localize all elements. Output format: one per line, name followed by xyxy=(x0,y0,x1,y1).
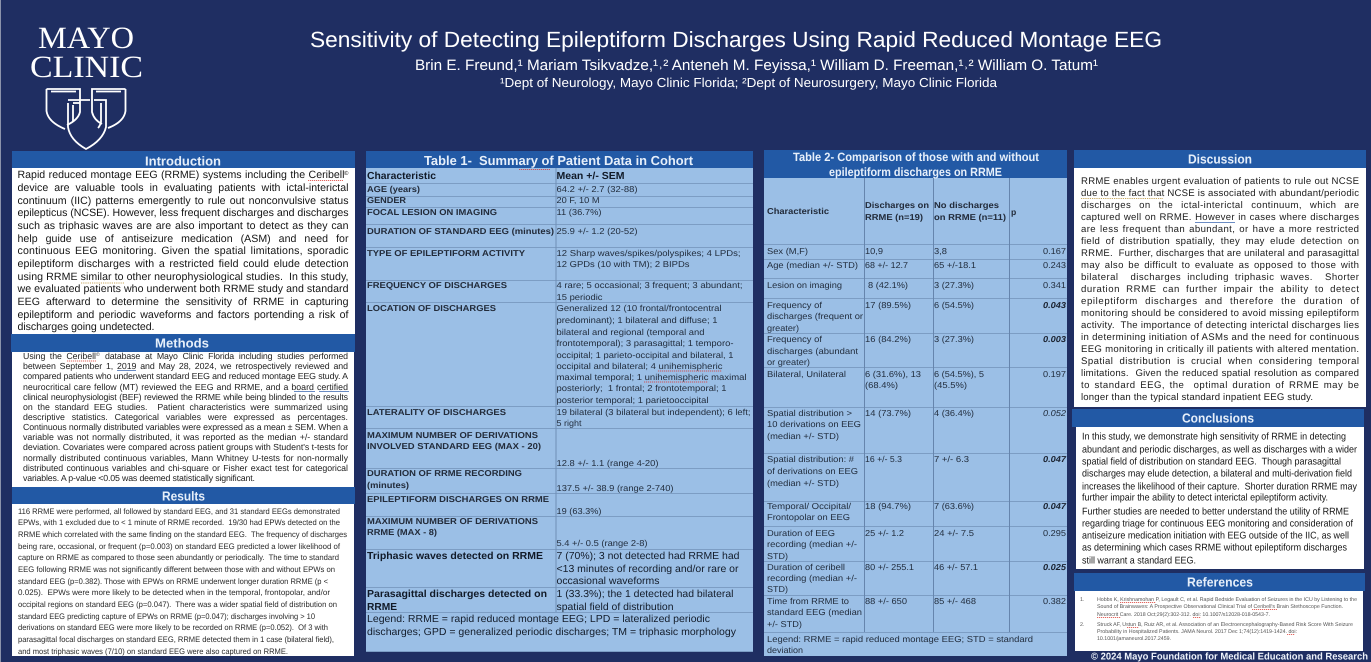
affiliations: ¹Dept of Neurology, Mayo Clinic Florida; ²Dept of Neurosurgery, Mayo Clinic Florida xyxy=(500,75,998,90)
row: bilateral: (68.4%) xyxy=(865,380,898,390)
table 1 header row: Characteristic xyxy=(367,171,436,182)
text block: introduction: continuous EEG monitoring. Given the spatial limitations, sporadic xyxy=(18,245,349,257)
row: duration of ceribell xyxy=(767,562,1066,594)
legend: table 1: Legend: RRME = rapid reduced montage EEG; LPD = lateralized periodic xyxy=(367,614,710,625)
heading: table 2: epileptiform discharges on RRME xyxy=(829,165,1002,179)
panel: methods xyxy=(11,334,355,487)
text block: introduction: epileptiform and periodic waveforms and factors portending a risk of xyxy=(18,309,349,321)
row: frequency frequent or greater: 6 (54.5%) xyxy=(934,300,974,310)
reference 2: 2. xyxy=(1080,622,1084,628)
row: temporal occipital frontopolar: Temporal/ Occipital/ xyxy=(767,501,852,511)
row: time to standard EEG: standard EEG (median xyxy=(767,607,862,617)
text block: introduction: Rapid reduced montage EEG (RRME) systems including the Ceribell xyxy=(18,169,344,181)
authors: Brin E. Freund,¹ Mariam Tsikvadze,¹˒² Anteneh M. Feyissa,¹ William D. Freeman,¹˒² William O. Tatum¹ xyxy=(415,57,1098,74)
row: duration of EEG: 24 +/- 7.5 xyxy=(934,528,974,538)
heading: introduction: Introduction xyxy=(145,154,221,168)
row: temporal occipital frontopolar xyxy=(767,501,1067,522)
text block: results: standard EEG predicting capture of EPWs on RRME (p=0.047); discharges involving > 10 xyxy=(18,612,316,621)
row: frequency frequent or greater: greater) xyxy=(767,323,799,333)
text block: discussion: RRME. Further, discharges that are unilateral and parasagittal xyxy=(1081,248,1359,259)
panel: table 1 xyxy=(366,151,753,652)
text block: methods: compared patients who underwent standard EEG and reduced montage EEG study. A xyxy=(23,371,348,381)
row: time to standard EEG: +/- STD) xyxy=(767,619,802,629)
text block: introduction: epilepticus (NCSE). However, less frequent discharges and discharges xyxy=(18,207,348,219)
panel: table 2 xyxy=(764,150,1067,656)
text block: discussion: discharges on the ictal-interictal continuum, which are xyxy=(1081,200,1359,211)
row: bilateral: Bilateral, Unilateral xyxy=(767,369,846,379)
row: spatial number: 16 +/- 5.3 xyxy=(865,454,902,464)
text block: methods: Continuous normally distributed variables were expressed as a mean ± SEM. When a xyxy=(23,422,348,432)
heading: methods: Methods xyxy=(155,336,209,350)
row: spatial over 10 xyxy=(767,408,1066,441)
text block: introduction xyxy=(16,169,349,333)
table 2 header row: Characteristic xyxy=(767,206,829,216)
row: spatial over 10: Spatial distribution > xyxy=(767,408,852,418)
text block: results xyxy=(18,507,347,656)
legend: table 2: Legend: RRME = rapid reduced montage EEG; STD = standard xyxy=(767,634,1033,644)
row: frequency: 4 rare; 5 occasional; 3 frequent; 3 abundant; xyxy=(556,280,742,290)
row: duration of EEG: recording (median +/- xyxy=(767,539,857,549)
row: duration of EEG: STD) xyxy=(767,551,788,561)
text block: discussion: are less frequent than abundant, or have a more restricted xyxy=(1081,224,1359,235)
logo wordmark: MAYO xyxy=(38,20,134,55)
text block: discussion: to standard EEG, the optimal duration of RRME may be xyxy=(1081,380,1359,391)
row: temporal occipital frontopolar: Frontopolar on EEG xyxy=(767,512,850,522)
text block: conclusions: Further studies are needed to better understand the utility of RRME xyxy=(1082,506,1349,518)
text block: results: derivations on standard EEG were more likely to be recorded on RRME (p=0.052). Of 3 with xyxy=(18,623,328,632)
row: sex xyxy=(767,246,1066,256)
row: spatial over 10: 0.052 xyxy=(1043,408,1066,418)
row: location: maximal temporal; 1 unihemispheric maximal xyxy=(556,372,747,382)
text block: methods: distributed continuous variables and chi-square or Fisher exact test for categorical xyxy=(23,463,348,473)
text block: discussion: bilateral discharges including triphasic waves. Shorter xyxy=(1081,272,1360,283)
row: lesion: 0.341 xyxy=(1043,280,1066,290)
row: frequency frequent or greater: 17 (89.5%) xyxy=(865,300,911,310)
reference 2 xyxy=(1080,622,1353,642)
row: frequency abundant or greater: or greater) xyxy=(767,357,810,367)
reference 1: 1. xyxy=(1080,597,1084,603)
row: frequency frequent or greater xyxy=(767,300,1066,333)
row: discharges on RRME: 19 (63.3%) xyxy=(556,506,602,516)
text block: results: standard EEG (p=0.382). Those with EPWs on RRME underwent longer duration RRME (p < xyxy=(18,577,328,586)
row: parasagittal: Parasagittal discharges detected on xyxy=(367,589,547,600)
table 1 header row xyxy=(367,171,624,182)
row: sex: 3,8 xyxy=(934,246,947,256)
row: duration of ceribell: recording (median +/- xyxy=(767,573,857,583)
row: type of activity: 12 GPDs (10 with TM); 2 BIPDs xyxy=(556,259,690,269)
row: duration of ceribell: STD) xyxy=(767,584,788,594)
text block: introduction: epileptiform discharges with a restricted field could elude detection xyxy=(18,258,349,270)
row: lesion: 8 (42.1%) xyxy=(868,280,908,290)
text block: discussion: duration RRME can further impair the ability to detect xyxy=(1081,284,1359,295)
row: maximum derivations standard: INVOLVED STANDARD EEG (MAX - 20) xyxy=(367,441,541,451)
row: spatial over 10: (median +/- STD) xyxy=(767,431,839,441)
row: time to standard EEG: 0.382 xyxy=(1043,596,1066,606)
row: maximum derivations standard: 12.8 +/- 1.1 (range 4-20) xyxy=(556,458,659,468)
table 2 header row: No discharges xyxy=(934,200,999,210)
row: sex: Sex (M,F) xyxy=(767,246,808,256)
row: duration of standard EEG: 25.9 +/- 1.2 (20-52) xyxy=(556,226,638,236)
text block: discussion: monitoring should be considered to avoid missing epileptiform xyxy=(1081,308,1359,319)
text block: methods: neurocritical care fellow (MT) reviewed the EEG and RRME, and a board certified xyxy=(23,382,348,392)
row: time to standard EEG: Time from RRME to xyxy=(767,596,849,606)
row: duration of EEG: Duration of EEG xyxy=(767,528,835,538)
row: spatial over 10: 4 (36.4%) xyxy=(934,408,974,418)
row: frequency frequent or greater: discharges (frequent or xyxy=(767,311,863,321)
text block: discussion: limitations. Given the reduced spatial resolution as compared xyxy=(1081,368,1359,379)
row: duration of EEG: 0.295 xyxy=(1043,528,1066,538)
row: triphasic waves: 7 (70%); 3 not detected had RRME had xyxy=(556,551,740,562)
panel: introduction xyxy=(12,151,355,334)
text block: methods: clinical neurophysiologist (BEF) reviewed the RRME while being blinded to the results xyxy=(23,392,349,402)
row: lesion: Lesion on imaging xyxy=(767,280,842,290)
row: duration of standard EEG: DURATION OF STANDARD EEG (minutes) xyxy=(367,226,554,236)
text block: methods: on the standard EEG studies. Patient characteristics were summarized using xyxy=(23,402,348,412)
text block: discussion: EEG monitoring in critically ill patients with altered mentation. xyxy=(1081,344,1359,355)
row: frequency abundant or greater: Frequency of xyxy=(767,334,823,344)
text block: methods xyxy=(23,351,349,483)
text block: conclusions: regarding triage for continuous EEG monitoring and consideration of xyxy=(1082,518,1353,530)
text block: introduction: continuum (IIC) patterns emergently to rule out nonconvulsive status xyxy=(18,195,348,207)
row: parasagittal: RRME xyxy=(367,602,397,613)
table 2 header row xyxy=(767,200,1016,222)
row: spatial number xyxy=(767,454,1067,488)
row: lesion xyxy=(767,280,1066,290)
row: triphasic waves xyxy=(367,551,740,587)
row: duration of ceribell: 0.025 xyxy=(1043,562,1066,572)
text block: methods: variable was not normally distributed, it was reported as the median +/- standard xyxy=(23,432,348,442)
text block: discussion: may also be difficult to evaluate as opposed to those with xyxy=(1081,260,1359,271)
table 2 header row: Discharges on xyxy=(865,200,929,210)
row: frequency abundant or greater: 0.003 xyxy=(1043,334,1066,344)
reference 2: Probability in Hospitalized Patients. JAMA Neurol. 2017 Dec 1;74(12):1419-1424. doi: xyxy=(1097,629,1297,635)
reference 1: Neurocrit Care. 2018 Oct;29(2):302-312. doi: 10.1007/s12028-018-0543-7. xyxy=(1097,612,1270,618)
row: frequency abundant or greater xyxy=(767,334,1066,367)
text block: discussion: longer than the typical standard inpatient EEG study. xyxy=(1081,392,1313,403)
row: focal lesion xyxy=(367,207,602,217)
row: spatial number: of derivations on EEG xyxy=(767,466,858,476)
row: temporal occipital frontopolar: 7 (63.6%) xyxy=(934,501,974,511)
row: temporal occipital frontopolar: 0.047 xyxy=(1043,501,1067,511)
row: gender xyxy=(367,195,600,205)
text block: discussion: field of distribution spatially, they may elude detection on xyxy=(1081,236,1359,247)
row: age: 68 +/- 12.7 xyxy=(865,260,908,270)
row: type of activity xyxy=(367,248,740,269)
text block: results: parasagittal focal discharges on standard EEG, RRME detected them in 1 case (bilateral field), xyxy=(18,635,334,644)
row: frequency abundant or greater: 3 (27.3%) xyxy=(934,334,974,344)
reference 2: Struck AF, Ustun B, Ruiz AR, et al. Association of an Electroencephalography-Based Risk Score With Seizure xyxy=(1097,622,1353,628)
row: age: 0.243 xyxy=(1043,260,1066,270)
text block: conclusions: still warrant a standard EEG. xyxy=(1082,556,1196,566)
row: spatial number: 7 +/- 6.3 xyxy=(934,454,969,464)
row: age: 65 +/-18.1 xyxy=(934,260,976,270)
row: parasagittal: 1 (33.3%); the 1 detected had bilateral xyxy=(556,589,734,600)
row: frequency xyxy=(367,280,742,302)
heading: results: Results xyxy=(162,488,205,504)
text block: discussion: captured well on RRME. However in cases where discharges xyxy=(1081,212,1359,223)
heading: table 2: Table 2- Comparison of those with and without xyxy=(793,150,1039,164)
row: maximum derivations RRME: 5.4 +/- 0.5 (range 2-8) xyxy=(556,538,648,548)
text block: methods: variables. A p-value <0.05 was deemed statistically significant. xyxy=(23,473,255,483)
row: location: posterior temporal; 1 parietooccipital xyxy=(556,395,709,405)
row: location: Generalized 12 (10 frontal/frontocentral xyxy=(556,303,722,313)
icon: three shields xyxy=(46,89,126,149)
row: age xyxy=(767,260,1066,270)
text block: introduction: © xyxy=(344,170,349,177)
reference 1: Hobbs K, Krishnamohan P, Legault C, et al. Rapid Bedside Evaluation of Seizures in the ICU by Listening to the xyxy=(1097,597,1357,603)
row: triphasic waves: Triphasic waves detected on RRME xyxy=(367,551,543,562)
text block: discussion: Spatial distribution is crucial when considering temporal xyxy=(1081,356,1359,367)
panel: conclusions xyxy=(1072,409,1364,569)
row: parasagittal xyxy=(367,589,734,613)
row: bilateral: 6 (54.5%), 5 xyxy=(934,369,984,379)
text block: methods: Using the Ceribell xyxy=(23,351,96,361)
row: gender: GENDER xyxy=(367,195,407,205)
text block: conclusions: antiseizure medication initiation with EEG outside of the IIC, as well xyxy=(1082,530,1349,542)
text block: introduction: we evaluated patients who underwent both RRME study and standard xyxy=(16,283,349,295)
row: maximum derivations RRME xyxy=(367,516,648,548)
title: Sensitivity of Detecting Epileptiform Discharges Using Rapid Reduced Montage EEG xyxy=(310,27,1162,52)
row: laterality: 5 right xyxy=(556,418,582,428)
row: lesion: 3 (27.3%) xyxy=(934,280,974,290)
row: frequency: 15 periodic xyxy=(556,292,603,302)
row: temporal occipital frontopolar: 18 (94.7%) xyxy=(865,501,911,511)
row: time to standard EEG: 85 +/- 468 xyxy=(934,596,976,606)
heading: table 2 xyxy=(793,150,1039,179)
row: laterality: LATERALITY OF DISCHARGES xyxy=(367,407,506,417)
row: maximum derivations RRME: MAXIMUM NUMBER OF DERIVATIONS xyxy=(367,516,538,526)
row: location xyxy=(367,303,747,405)
text block: conclusions: spatial field of distribution on standard EEG. Though parasagittal xyxy=(1082,456,1341,468)
row: laterality xyxy=(367,407,750,428)
table 2 header row: RRME (n=19) xyxy=(865,212,923,222)
row: location: frontotemporal); 3 parasagittal; 1 temporo- xyxy=(556,338,734,348)
table 2 header row: on RRME (n=11) xyxy=(934,212,1006,222)
text block: discussion: RRME enables urgent evaluation of patients to rule out NCSE xyxy=(1081,176,1359,187)
panel: results xyxy=(12,487,355,656)
row: triphasic waves: <13 minutes of recording and/or rare or xyxy=(556,564,739,575)
row: frequency frequent or greater: 0.043 xyxy=(1043,300,1066,310)
row: frequency abundant or greater: discharges (abundant xyxy=(767,346,859,356)
text block: conclusions: further impair the ability to detect interictal epileptiform activity. xyxy=(1082,492,1328,504)
row: spatial number: Spatial distribution: # xyxy=(767,454,854,464)
legend: table 1: discharges; GPD = generalized periodic discharges; TM = triphasic morphology xyxy=(367,627,737,638)
row: time to standard EEG xyxy=(767,596,1066,629)
row: spatial over 10: 14 (73.7%) xyxy=(865,408,911,418)
row: laterality: 19 bilateral (3 bilateral but independent); 6 left; xyxy=(556,407,750,417)
text block: introduction: such as triphasic waves are are also important to detect as they can xyxy=(18,220,349,232)
text block: results: capture on RRME as compared to those seen abundantly or periodically. The time to standard xyxy=(18,553,339,562)
heading: discussion: Discussion xyxy=(1188,152,1252,166)
row: bilateral: (45.5%) xyxy=(934,380,967,390)
text block: conclusions: as determining which cases RRME without epileptiform discharges xyxy=(1082,542,1347,554)
heading: references: References xyxy=(1187,574,1253,590)
text block: results: being rare, occasional, or frequent (p=0.003) on standard EEG predicted a lower likelihood of xyxy=(18,542,341,551)
logo wordmark: CLINIC xyxy=(30,49,143,84)
row: maximum derivations standard xyxy=(367,430,659,468)
row: focal lesion: 11 (36.7%) xyxy=(556,207,602,217)
row: frequency abundant or greater: 16 (84.2%) xyxy=(865,334,911,344)
text block: results: and most triphasic waves (7/10) on standard EEG were also captured on RRME. xyxy=(18,647,288,656)
row: triphasic waves: occasional waveforms xyxy=(556,576,660,587)
text block: results: 116 RRME were performed, all followed by standard EEG, and 31 standard EEGs demonstrated xyxy=(18,507,340,516)
logo: Mayo Clinic xyxy=(30,20,143,149)
row: time to standard EEG: 88 +/- 650 xyxy=(865,596,907,606)
row: spatial over 10: 10 derivations on EEG xyxy=(767,419,861,429)
text block: conclusions: discharges may elude detection, a bilateral and multi-derivation field xyxy=(1082,468,1352,480)
text block: introduction: discharges going undetected. xyxy=(18,321,154,333)
row: duration of RRME: (minutes) xyxy=(367,480,409,490)
legend: table 1 xyxy=(367,614,737,638)
row: duration of RRME: 137.5 +/- 38.9 (range 2-740) xyxy=(556,483,674,493)
row: location: bilateral and regional (temporal and xyxy=(556,327,705,337)
row: duration of ceribell: 46 +/- 57.1 xyxy=(934,562,978,572)
text block: results: occipital regions on standard EEG (p=0.047). There was a wider spatial field of distribution on xyxy=(18,600,337,609)
heading: table 1: Table 1- Summary of Patient Data in Cohort xyxy=(424,153,694,168)
row: bilateral: 0.197 xyxy=(1043,369,1066,379)
legend: table 2 xyxy=(767,634,1033,655)
row: spatial number: (median +/- STD) xyxy=(767,478,839,488)
text block: results: 0.025). EPWs were more likely to be detected when in the temporal, frontopolar, and/or xyxy=(18,588,330,597)
table 1 header row: Mean +/- SEM xyxy=(556,171,624,182)
text block: introduction: EEG afterward to determine the sensitivity of RRME in capturing xyxy=(18,296,349,308)
row: location: predominant); 1 bilateral and diffuse; 1 xyxy=(556,315,718,325)
text block: discussion: epileptiform discharges and therefore the duration of xyxy=(1081,296,1359,307)
row: location: posteriorly; 1 frontal; 2 frontotemporal; 1 xyxy=(556,383,727,393)
row: duration of standard EEG xyxy=(367,226,638,236)
text block: methods: between September 1, 2019 and May 28, 2024, we retrospectively reviewed and xyxy=(23,361,348,371)
reference 2: 10.1001/jamaneurol.2017.2459. xyxy=(1097,636,1171,642)
text block: discussion: in determining initiation of ASMs and the need for continuous xyxy=(1081,332,1359,343)
row: discharges on RRME xyxy=(367,494,602,516)
row: parasagittal: spatial field of distribution xyxy=(556,602,674,613)
row: sex: 0.167 xyxy=(1043,246,1066,256)
row: type of activity: TYPE OF EPILEPTIFORM ACTIVITY xyxy=(367,248,525,258)
text block: discussion: activity. The importance of detecting interictal discharges lies xyxy=(1081,320,1359,331)
text block: discussion: due to the fact that NCSE is associated with abundant/periodic xyxy=(1081,188,1359,199)
row: age: 64.2 +/- 2.7 (32-88) xyxy=(556,184,638,194)
row: bilateral xyxy=(767,369,1066,390)
row: duration of ceribell: 80 +/- 255.1 xyxy=(865,562,914,572)
row: duration of EEG: 25 +/- 1.2 xyxy=(865,528,904,538)
text block: methods: database at Mayo Clinic Florida including studies performed xyxy=(105,351,348,361)
table 2 header row: p xyxy=(1011,207,1016,217)
text block: results: EPWs, with 1 excluded due to < 1 minute of RRME recorded. 19/30 had EPWs detected on the xyxy=(18,518,341,527)
row: spatial number: 0.047 xyxy=(1043,454,1067,464)
panel: discussion xyxy=(1074,150,1366,407)
panel: references xyxy=(1074,573,1365,651)
row: maximum derivations standard: MAXIMUM NUMBER OF DERIVATIONS xyxy=(367,430,538,440)
row: age: Age (median +/- STD) xyxy=(767,260,858,270)
row: frequency frequent or greater: Frequency of xyxy=(767,300,823,310)
text block: introduction: using RRME similar to other neurophysiological studies. In this study, xyxy=(18,271,348,283)
row: bilateral: 6 (31.6%), 13 xyxy=(865,369,921,379)
row: gender: 20 F, 10 M xyxy=(556,195,600,205)
text block: introduction: device are valuable tools in evaluating patients with ictal-interictal xyxy=(18,182,348,194)
text block: results: RRME which correlated with the same finding on the standard EEG. The frequency of discharges xyxy=(18,530,347,539)
row: location: LOCATION OF DISCHARGES xyxy=(367,303,496,313)
row: sex: 10,9 xyxy=(865,246,883,256)
row: age xyxy=(367,184,638,194)
reference 1 xyxy=(1080,597,1357,618)
text block: methods: normally distributed continuous variables, Mann Whitney U-tests for non-normally xyxy=(23,453,349,463)
text block: introduction: help guide use of antiseizure medication (ASM) and need for xyxy=(18,233,349,245)
row: maximum derivations RRME: RRME (MAX - 8) xyxy=(367,527,437,537)
row: duration of ceribell: Duration of ceribell xyxy=(767,562,845,572)
text block: conclusions: In this study, we demonstrate high sensitivity of RRME in detecting xyxy=(1082,432,1346,442)
row: location: occipital; 1 parieto-occipital and bilateral, 1 xyxy=(556,350,734,360)
row: frequency: FREQUENCY OF DISCHARGES xyxy=(367,280,507,290)
text block: methods: © xyxy=(96,352,100,358)
row: age: AGE (years) xyxy=(367,184,420,194)
reference 1: Sound of Brainwaves: A Prospective Observational Clinical Trial of Ceribell's Brain Stethoscope Function. xyxy=(1097,604,1343,610)
text block: methods: descriptive statistics. Categorical variables were expressed as percentages. xyxy=(23,412,348,422)
row: duration of RRME: DURATION OF RRME RECORDING xyxy=(367,468,522,478)
logo wordmark xyxy=(30,20,143,84)
text block: methods: deviation. Covariates were compared across patient groups with Student's t-tests for xyxy=(23,442,348,452)
text block: results: EEG following RRME was not significantly different between those with and without EPWs on xyxy=(18,565,335,574)
row: duration of RRME xyxy=(367,468,674,493)
row: discharges on RRME: EPILEPTIFORM DISCHARGES ON RRME xyxy=(367,494,549,504)
row: location: occipital and bilateral; 4 unihemispheric xyxy=(556,361,723,371)
title block xyxy=(310,27,1162,90)
text block: conclusions xyxy=(1082,432,1358,566)
row: duration of EEG xyxy=(767,528,1066,561)
heading: conclusions: Conclusions xyxy=(1182,410,1254,426)
row: focal lesion: FOCAL LESION ON IMAGING xyxy=(367,207,497,217)
text block: discussion xyxy=(1081,176,1360,403)
row: type of activity: 12 Sharp waves/spikes/polyspikes; 4 LPDs; xyxy=(556,248,740,258)
legend: table 2: deviation xyxy=(767,645,803,655)
